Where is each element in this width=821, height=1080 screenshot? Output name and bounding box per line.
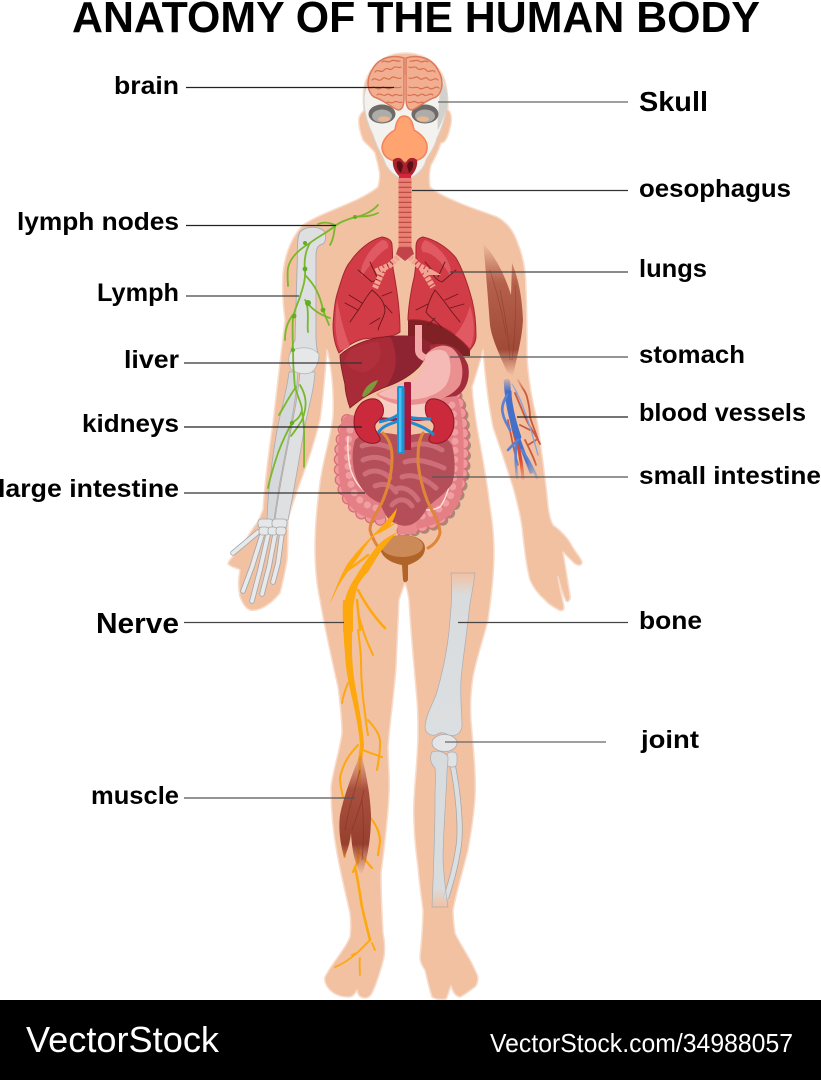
labels: right column: stomach [639, 341, 745, 369]
labels: left column: lymph nodes [17, 208, 179, 236]
labels: right column: Skull [639, 86, 708, 117]
fibula head [447, 752, 457, 767]
labels: left column: liver [124, 346, 179, 374]
gallbladder [362, 380, 378, 397]
nerve groin blades [330, 508, 397, 632]
labels: left column: Nerve [96, 608, 179, 640]
labels: right column [639, 86, 821, 754]
colon outer bumps [340, 394, 464, 531]
footer bar [0, 1000, 821, 1080]
labels: left column: brain [114, 72, 179, 100]
finger bones [233, 532, 282, 601]
blood vessels [502, 380, 540, 478]
arm muscle [483, 243, 523, 376]
arteries [510, 392, 523, 478]
right kidney [425, 399, 454, 443]
ulna [267, 372, 298, 520]
lymph network [268, 205, 378, 488]
patella [432, 734, 457, 752]
labels: right column: small intestine [639, 462, 821, 490]
labels: left column [0, 72, 179, 810]
labels: left column: muscle [91, 782, 179, 810]
throat [393, 158, 417, 178]
stomach and spleen [376, 325, 469, 420]
leg muscle [339, 752, 371, 875]
lung veins [345, 262, 464, 330]
radius [275, 372, 315, 520]
left kidney [354, 399, 383, 443]
large intestine [340, 394, 466, 533]
bladder [380, 535, 425, 582]
trachea rings [398, 178, 412, 254]
nerve [330, 508, 397, 975]
femur [425, 573, 475, 736]
dark lung base [408, 318, 470, 356]
human body silhouette [228, 53, 582, 999]
aorta [404, 382, 411, 450]
labels: left column: large intestine [0, 475, 179, 503]
kidneys and great vessels [354, 382, 454, 548]
intestines [340, 394, 466, 534]
footer url: VectorStock.com/34988057 [490, 1028, 793, 1058]
small intestine [353, 433, 455, 526]
colon shadow [402, 396, 466, 533]
labels: right column: oesophagus [639, 175, 791, 203]
renal vessels [378, 413, 434, 435]
nasal cavity [382, 116, 427, 162]
labels: right column: bone [639, 607, 702, 635]
oesophagus and bronchi [375, 178, 433, 288]
labels: left column: Lymph [97, 279, 179, 307]
skeleton arm: left side bones [233, 227, 326, 601]
liver [340, 335, 433, 408]
lymph vessels [268, 205, 378, 488]
labels: right column: blood vessels [639, 399, 806, 427]
lungs [333, 237, 476, 356]
brain [368, 56, 442, 110]
leader lines [184, 88, 628, 798]
footer logo: VectorStock [26, 1019, 220, 1060]
fibula [446, 762, 460, 898]
nerve trunk [343, 600, 364, 760]
labels: left column: kidneys [82, 410, 179, 438]
colon seams [348, 437, 452, 510]
skull [364, 72, 447, 179]
bronchi [375, 257, 433, 288]
vena cava [397, 386, 404, 454]
leg skeleton [425, 573, 475, 907]
pancreas [380, 395, 430, 420]
labels: right column: lungs [639, 255, 707, 283]
labels: right column: joint [640, 726, 700, 754]
tibia [431, 751, 448, 907]
left lung [333, 237, 400, 353]
wrist bones [258, 519, 287, 535]
eye sockets [368, 104, 438, 124]
humerus [290, 227, 326, 364]
spleen [430, 344, 469, 398]
gastric tube [418, 325, 425, 358]
stomach [376, 346, 462, 405]
elbow joint [289, 348, 319, 374]
right lung [408, 237, 476, 350]
veins [507, 382, 518, 437]
colon body [348, 400, 454, 520]
kidney ureters [370, 433, 440, 548]
lymph nodes [290, 215, 357, 425]
